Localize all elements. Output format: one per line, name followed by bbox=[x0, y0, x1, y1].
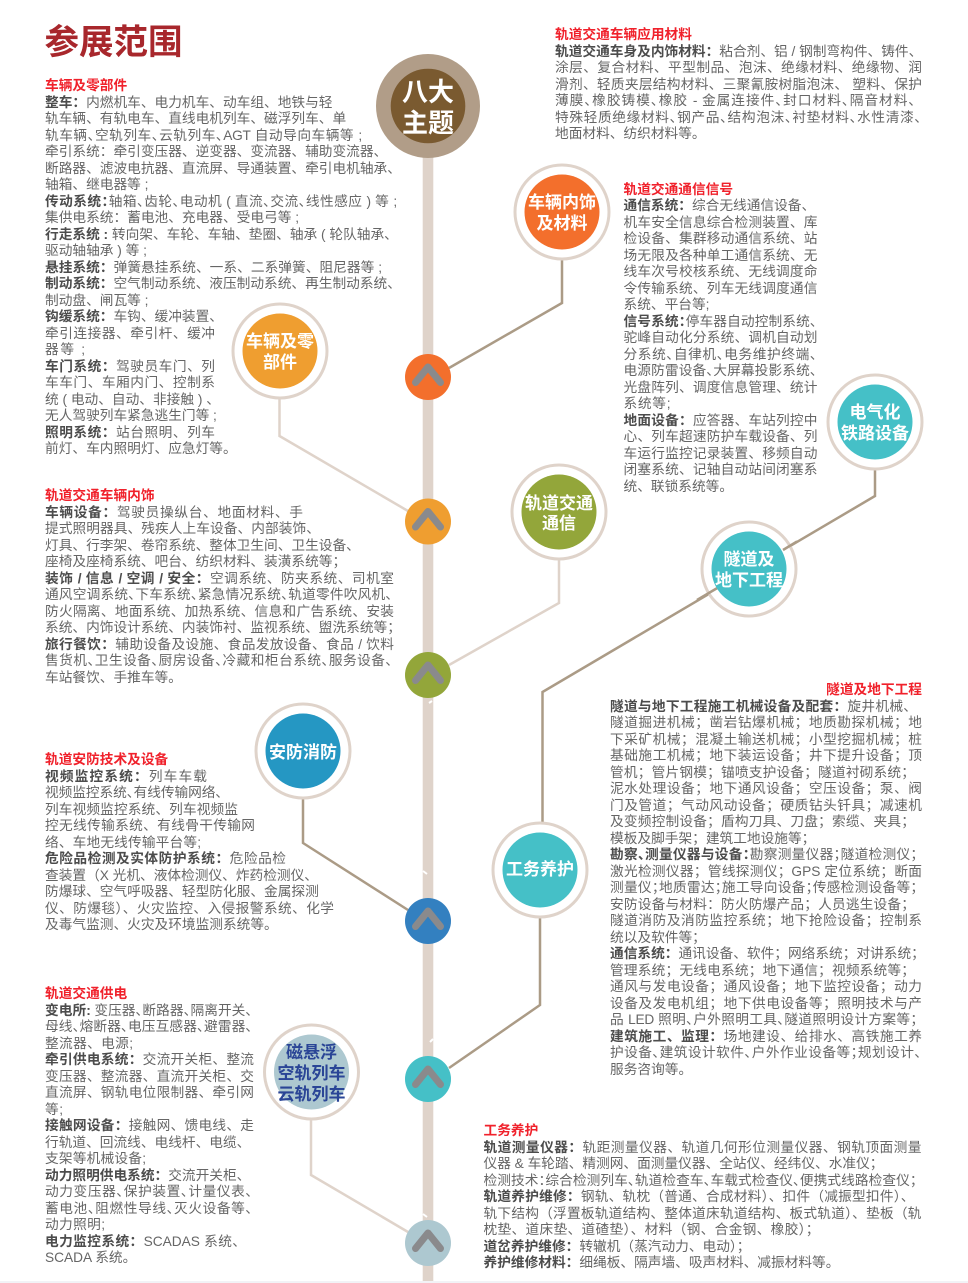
body text: 车运行监控记录装置、移频自动 bbox=[624, 446, 818, 460]
theme circle: electrified railway bbox=[828, 375, 922, 469]
heading: 工务养护 bbox=[484, 1123, 538, 1138]
body text: 系统、平台等; bbox=[624, 297, 709, 312]
body text: 防火隔离、地面系统、加热系统、信息和广告系统、安装 bbox=[45, 604, 394, 618]
body text: 心、列车超速防护车载设备、列 bbox=[624, 429, 818, 444]
body text: 车站餐饮、手推车等。 bbox=[45, 670, 182, 684]
text panel: track maintenance bbox=[484, 1123, 922, 1270]
theme circle: electrified railway: 电气化 bbox=[850, 402, 900, 422]
body text: 系统、内饰设计系统、内装饰衬、监视系统、盥洗系统等； bbox=[45, 620, 401, 635]
body text: 统 ( 电动、自动、非接触 ) 、 bbox=[45, 392, 220, 406]
heading: 轨道安防技术及设备 bbox=[45, 752, 168, 767]
body text: 旅行餐饮：辅助设备及设施、食品发放设备、食品 / 饮料 bbox=[45, 636, 394, 652]
theme circle: maglev, monorail, cloud rail: 磁悬浮 bbox=[286, 1043, 337, 1062]
text panel: security technology bbox=[45, 752, 334, 932]
body text: 检设备、集群移动通信系统、站 bbox=[624, 231, 818, 246]
timeline node: blue bbox=[405, 898, 451, 944]
heading: 轨道交通供电 bbox=[45, 986, 127, 1001]
body text: 管机；管片钢模；锚喷支护设备；隧道衬砌系统； bbox=[610, 764, 915, 780]
theme circle: interior materials bbox=[515, 165, 609, 259]
theme circle: security and fire bbox=[256, 704, 350, 798]
body text: 品 LED 照明、户外照明工具、隧道照明设计方案等； bbox=[610, 1012, 917, 1027]
body text: 灯具、行李架、卷帘系统、整体卫生间、卫生设备、 bbox=[45, 538, 360, 552]
body text: 断路器、滤波电抗器、直流屏、导通装置、牵引电机轴承、 bbox=[45, 160, 401, 176]
body text: 仪器 & 车轮踏、精测网、面测量仪器、全站仪、经纬仪、水准仪； bbox=[484, 1156, 884, 1171]
timeline node: orange bbox=[405, 354, 451, 400]
body text: 隧道与地下工程施工机械设备及配套：旋井机械、 bbox=[610, 698, 917, 714]
body text: 隧道消防及消防监控系统；地下抢险设备；控制系 bbox=[610, 913, 922, 928]
body text: 动力照明供电系统：交流开关柜、 bbox=[45, 1168, 250, 1182]
body text: 装饰 / 信息 / 空调 / 安全：空调系统、防夹系统、司机室 bbox=[45, 570, 394, 586]
body text bbox=[45, 94, 401, 456]
body text: 防爆球、空气呼吸器、轻型防化服、金属探测 bbox=[45, 884, 319, 899]
body text: 整流器、电源; bbox=[45, 1036, 133, 1050]
body text: 仪、防爆毯）、火灾监控、入侵报警系统、化学 bbox=[45, 900, 334, 916]
body text: 及变频控制设备；盾构刀具、刀盘；索缆、夹具； bbox=[610, 814, 915, 829]
body text: 安防设备与材料：防火防爆产品；人员逃生设备； bbox=[610, 896, 915, 912]
body text: 分系统、自律机、电务维护终端、 bbox=[624, 346, 816, 362]
body text: 电源防雷设备、大屏幕投影系统、 bbox=[624, 363, 816, 378]
body text: 变压器、整流器、直流开关柜、交 bbox=[45, 1068, 254, 1084]
theme circle: communication signal: 通信 bbox=[542, 514, 576, 533]
body text: 轨下结构（浮置板轨道结构、整体道床轨道结构、板式轨道）、垫板（轨 bbox=[484, 1206, 922, 1220]
body text bbox=[45, 504, 401, 684]
body text: 泥水处理设备；地下通风设备；空压设备；泵、阀 bbox=[610, 781, 922, 796]
body text: 车门系统：驾驶员车门、列 bbox=[45, 358, 215, 374]
theme circle: vehicle parts: 部件 bbox=[263, 352, 297, 372]
heading: 轨道交通车辆应用材料 bbox=[555, 27, 692, 42]
main hub: eight themes bbox=[376, 54, 480, 158]
theme circle: track maintenance: 工务养护 bbox=[506, 859, 574, 879]
body text: 母线、熔断器、电压互感器、避雷器、 bbox=[45, 1019, 252, 1034]
body text bbox=[555, 44, 922, 141]
body text: 车车门、车厢内门、控制系 bbox=[45, 375, 215, 390]
body text: 照明系统：站台照明、列车 bbox=[45, 424, 215, 440]
body text: 动力变压器、保护装置、计量仪表、 bbox=[45, 1184, 252, 1199]
body text: 道岔养护维修：转辙机（蒸汽动力、电动）； bbox=[484, 1238, 750, 1254]
bottom edge strip bbox=[0, 1281, 968, 1283]
timeline node: pale blue bbox=[405, 1220, 451, 1266]
text panel: communication and signalling bbox=[624, 182, 818, 494]
body text: 制动系统：空气制动系统、液压制动系统、再生制动系统、 bbox=[45, 276, 401, 291]
title: 参展范围 bbox=[44, 24, 182, 62]
body text: 枕垫、道床垫、道碴垫）、材料（钢、合金钢、橡胶）； bbox=[484, 1222, 820, 1237]
theme circle: track maintenance bbox=[493, 823, 587, 917]
body text: 养护维修材料：细绳板、隔声墙、吸声材料、减振材料等。 bbox=[484, 1255, 839, 1270]
timeline trunk bbox=[423, 150, 433, 1283]
body text: 隧道掘进机械；凿岩钻爆机械；地质勘探机械；地 bbox=[610, 715, 922, 730]
body text: 管理系统；无线电系统；地下通信；视频系统等； bbox=[610, 962, 915, 978]
body text: 驱动轴轴承 ) 等 ; bbox=[45, 243, 147, 258]
connector: maglev bbox=[311, 1119, 408, 1232]
body text: 闭塞系统、记轴自动站间闭塞系 bbox=[624, 462, 818, 477]
body text: 地面设备：应答器、车站列控中 bbox=[624, 412, 817, 428]
body text: 激光检测仪器；管线探测仪；GPS 定位系统；断面 bbox=[610, 864, 922, 878]
connector: electrified railway and tunnel bbox=[542, 460, 875, 826]
body text: 整车：内燃机车、电力机车、动车组、地铁与轻 bbox=[45, 94, 332, 110]
body text: 统以及软件等； bbox=[610, 930, 706, 944]
timeline node: green bbox=[405, 652, 451, 698]
text panel: tunnel and underground engineering bbox=[610, 682, 925, 1076]
body text: 通风与发电设备；通风设备；地下监控设备；动力 bbox=[610, 979, 922, 994]
theme circle: vehicle parts bbox=[233, 304, 327, 398]
body text: 行轨道、回流线、电线杆、电缆、 bbox=[45, 1134, 250, 1150]
theme circle: tunnel and underground bbox=[697, 522, 797, 616]
body text: 接触网设备：接触网、馈电线、走 bbox=[45, 1118, 254, 1133]
main hub: eight themes: 主题 bbox=[402, 108, 454, 138]
body text: 传动系统：轴箱、齿轮、电动机 ( 直流、交流、线性感应 ) 等 ; bbox=[45, 194, 397, 208]
body text: 提式照明器具、残疾人上车设备、内部装饰、 bbox=[45, 521, 320, 536]
body text: 悬挂系统：弹簧悬挂系统、一系、二系弹簧、阻尼器等 ; bbox=[45, 260, 382, 274]
theme circle: tunnel and underground: 隧道及 bbox=[724, 549, 774, 569]
body text: 轨车辆、有轨电车、直线电机列车、磁浮列车、单 bbox=[45, 111, 346, 126]
connector: security bbox=[303, 797, 408, 910]
body text: 行走系统 : 转向架、车轮、车轴、垫圈、轴承 ( 轮队轴承、 bbox=[45, 226, 398, 242]
body text: 电力监控系统：SCADAS 系统、 bbox=[45, 1234, 246, 1248]
body text: 视频监控系统：列车车载 bbox=[45, 768, 207, 784]
theme circle: tunnel and underground: 地下工程 bbox=[715, 571, 783, 590]
body text: 特殊轻质绝缘材料、钢产品、结构泡沫、衬垫材料、水性清漆、 bbox=[555, 110, 921, 124]
theme circle: security and fire: 安防消防 bbox=[269, 742, 337, 762]
body text: 令传输系统、列车无线调度通信 bbox=[624, 280, 818, 296]
theme circle: maglev, monorail, cloud rail bbox=[264, 1025, 358, 1119]
body text: 售货机、卫生设备、厨房设备、冷藏和柜台系统、服务设备、 bbox=[45, 653, 392, 668]
body text: 基础施工机械；地下装运设备；井下提升设备；顶 bbox=[610, 748, 922, 763]
body text: 建筑施工、监理：场地建设、给排水、高铁施工养 bbox=[610, 1028, 922, 1044]
theme circle: vehicle parts: 车辆及零 bbox=[246, 331, 314, 351]
body text: 轨道养护维修：钢轨、轨枕（普通、合成材料）、扣件（减振型扣件）、 bbox=[484, 1189, 914, 1204]
body text bbox=[624, 198, 818, 494]
heading: 轨道交通车辆内饰 bbox=[45, 488, 155, 503]
body text: 牵引供电系统：交流开关柜、整流 bbox=[45, 1052, 254, 1067]
body text: 轨道测量仪器：轨距测量仪器、轨道几何形位测量仪器、钢轨顶面测量 bbox=[484, 1140, 921, 1154]
connector: communication signal bbox=[449, 559, 559, 665]
body text: 设备及发电机组；地下供电设备等；照明技术与产 bbox=[610, 996, 922, 1010]
theme circle: maglev, monorail, cloud rail: 空轨列车 bbox=[278, 1063, 346, 1083]
body text: SCADA 系统。 bbox=[45, 1250, 136, 1265]
theme circle: interior materials: 及材料 bbox=[536, 214, 588, 233]
body text: 蓄电池、阻燃性导线、灭火设备等、 bbox=[45, 1200, 252, 1216]
body text: 络、车地无线传输平台等; bbox=[45, 834, 201, 850]
body text: 查装置（X 光机、液体检测仪、炸药检测仪、 bbox=[45, 868, 318, 882]
body text: 检测技术：综合检测列车、轨道检查车、车载式检查仪、便携式线路检查仪； bbox=[484, 1172, 916, 1188]
body text: 牵引连接器、牵引杆、缓冲 bbox=[45, 326, 215, 340]
body text: 勘察、测量仪器与设备：勘察测量仪器；隧道检测仪； bbox=[610, 847, 917, 862]
body text: 动力照明; bbox=[45, 1217, 105, 1232]
body text bbox=[45, 768, 334, 932]
body text: 变电所: 变压器、断路器、隔离开关、 bbox=[45, 1002, 252, 1018]
body text: 薄膜、橡胶铸模、橡胶 - 金属连接件、封口材料、隔音材料、 bbox=[555, 93, 915, 108]
connector: track maintenance bbox=[449, 907, 540, 1068]
heading: 车辆及零部件 bbox=[45, 78, 127, 93]
theme circle: electrified railway: 铁路设备 bbox=[841, 423, 909, 443]
body text: 控无线传输系统、有线骨干传输网 bbox=[45, 818, 255, 833]
text panel: vehicles and parts bbox=[45, 78, 401, 456]
body text: 通信系统：通讯设备、软件；网络系统；对讲系统； bbox=[610, 946, 925, 961]
heading: 隧道及地下工程 bbox=[826, 682, 922, 697]
theme circle: maglev, monorail, cloud rail: 云轨列车 bbox=[278, 1084, 346, 1104]
body text: 门及管道；气动风动设备；硬质钻头钎具；减速机 bbox=[610, 798, 922, 812]
body text: 线车次号校核系统、无线调度命 bbox=[624, 264, 818, 279]
body text: 系统等; bbox=[624, 396, 670, 411]
body text: 轴箱、继电器等 ; bbox=[45, 177, 148, 192]
text panel: vehicle materials bbox=[555, 27, 922, 141]
body text: 制动盘、闸瓦等 ; bbox=[45, 292, 148, 308]
body text: 模板及脚手架；建筑工地设施等； bbox=[610, 830, 815, 846]
main hub: eight themes: 八大 bbox=[402, 77, 454, 107]
body text: 场无限及各种单工通信系统、无 bbox=[624, 248, 818, 262]
body text bbox=[610, 698, 925, 1076]
heading: 轨道交通通信信号 bbox=[624, 182, 733, 196]
text panel: power supply bbox=[45, 986, 254, 1265]
body text: 危险品检测及实体防护系统：危险品检 bbox=[45, 851, 286, 866]
body text: 光盘阵列、调度信息管理、统计 bbox=[624, 380, 818, 394]
body text: 滑剂、轻质夹层结构材料、三聚氰胺树脂泡沫、 塑料、保护 bbox=[555, 76, 922, 92]
body text: 下采矿机械；混凝土输送机械；小型挖掘机械；桩 bbox=[610, 732, 922, 746]
body text: 机车安全信息综合检测装置、库 bbox=[624, 214, 818, 230]
body text: 牵引系统：牵引变压器、逆变器、变流器、辅助变流器、 bbox=[45, 144, 387, 159]
body text: 通风空调系统、下车系统、紧急情况系统、轨道零件吹风机、 bbox=[45, 587, 392, 602]
body text: 测量仪；地质雷达；施工导向设备；传感检测设备等； bbox=[610, 880, 917, 895]
body text: 轨道交通车身及内饰材料：粘合剂、铝 / 钢制弯构件、铸件、 bbox=[555, 44, 922, 58]
body text: 无人驾驶列车紧急逃生门等 ; bbox=[45, 408, 217, 423]
body text: 座椅及座椅系统、吧台、纺织材料、装潢系统等； bbox=[45, 554, 346, 569]
connector: interior materials bbox=[449, 259, 562, 368]
body text: 前灯、车内照明灯、应急灯等。 bbox=[45, 441, 237, 456]
body text: 统、联锁系统等。 bbox=[624, 478, 733, 494]
theme circle: communication signal: 轨道交通 bbox=[525, 493, 593, 513]
body text: 涂层、复合材料、平型制品、泡沫、绝缘材料、绝缘物、润 bbox=[555, 60, 922, 75]
body text: 钩缓系统：车钩、缓冲装置、 bbox=[45, 309, 223, 324]
body text bbox=[45, 1002, 254, 1265]
body text: 列车视频监控系统、列车视频监 bbox=[45, 802, 238, 816]
body text: 地面材料、纺织材料等。 bbox=[555, 126, 706, 141]
body text: 集供电系统：蓄电池、充电器、受电弓等 ; bbox=[45, 210, 299, 225]
body text: 信号系统：停车器自动控制系统、 bbox=[624, 314, 816, 328]
text panel: vehicle interior bbox=[45, 488, 401, 684]
timeline node: amber bbox=[405, 498, 451, 544]
body text: 支架等机械设备; bbox=[45, 1151, 146, 1166]
body text: 驼峰自动化分系统、调机自动划 bbox=[624, 330, 818, 345]
body text: 视频监控系统、有线传输网络、 bbox=[45, 785, 222, 800]
body text: 器等 ; bbox=[45, 342, 85, 357]
body text: 直流屏、钢轨电位限制器、牵引网 bbox=[45, 1085, 254, 1100]
theme circle: communication signal bbox=[512, 465, 606, 559]
body text: 服务咨询等。 bbox=[610, 1062, 692, 1076]
theme circle: interior materials: 车辆内饰 bbox=[528, 192, 596, 212]
body text: 及毒气监测、火灾及环境监测系统等。 bbox=[45, 917, 278, 932]
body text: 护设备、建筑设计软件、户外作业设备等；规划设计、 bbox=[610, 1045, 921, 1060]
body text: 通信系统：综合无线通信设备、 bbox=[624, 198, 815, 213]
connector: vehicle parts bbox=[280, 399, 408, 511]
body text: 等; bbox=[45, 1102, 63, 1116]
body text: 轨车辆、空轨列车、云轨列车、AGT 自动导向车辆等 ; bbox=[45, 128, 362, 142]
body text bbox=[484, 1140, 922, 1270]
body text: 车辆设备：驾驶员操纵台、地面材料、手 bbox=[45, 504, 303, 520]
timeline node: teal bbox=[405, 1056, 451, 1102]
